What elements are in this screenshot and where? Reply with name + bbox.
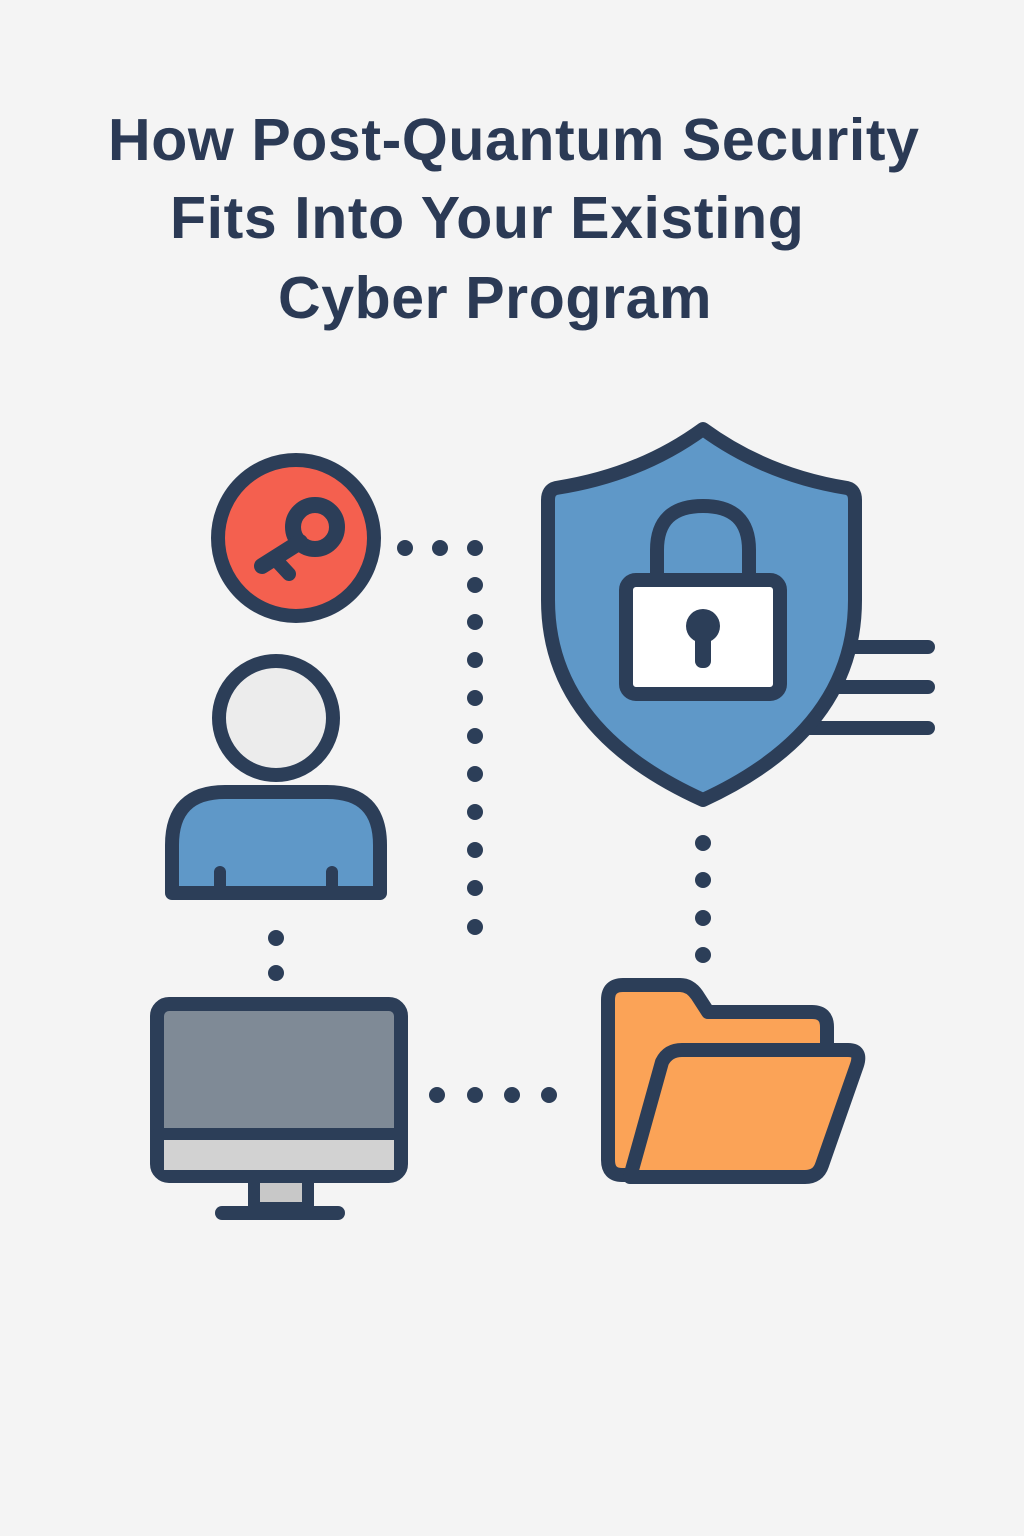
dotted connector: user to monitor	[268, 930, 284, 981]
title: How Post-Quantum Security	[108, 107, 920, 173]
title: Cyber Program	[278, 265, 712, 331]
icon: user	[172, 661, 380, 893]
icon: key	[218, 460, 374, 616]
icon: shield with lock	[548, 429, 928, 800]
dotted connector: key to shield	[397, 540, 483, 935]
dotted connector: monitor to folder	[429, 1087, 557, 1103]
dotted connector: shield to folder	[695, 835, 711, 963]
icon: folder	[608, 985, 858, 1177]
icon: monitor	[157, 1004, 401, 1213]
title: Fits Into Your Existing	[170, 185, 804, 251]
title	[108, 107, 920, 331]
